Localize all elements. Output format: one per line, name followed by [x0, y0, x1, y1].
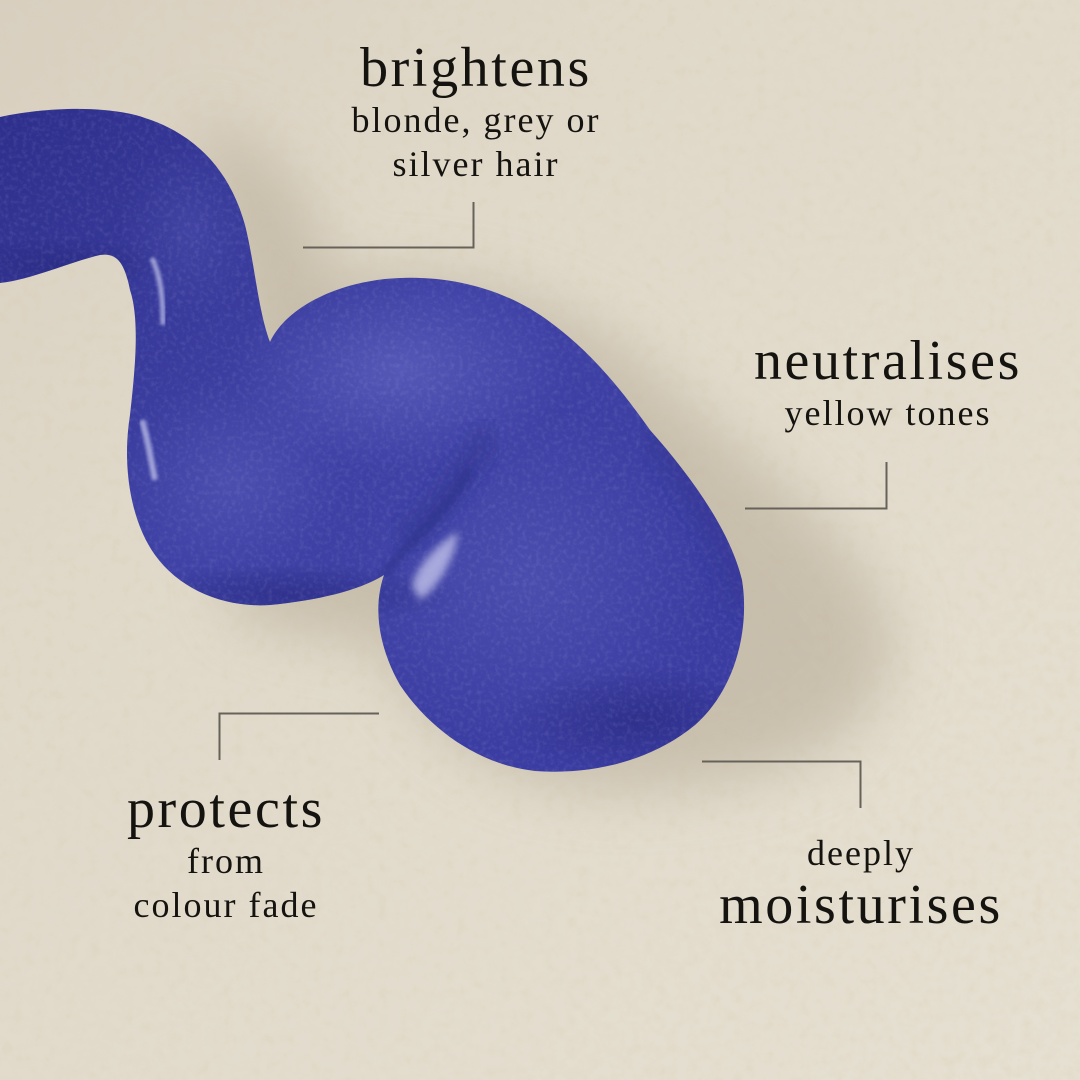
label: deeply moisturises: deeply — [807, 833, 915, 873]
label: neutralises: yellow tones — [784, 393, 991, 433]
label: protects — [127, 778, 325, 925]
label: neutralises — [754, 330, 1022, 433]
label: deeply moisturises: moisturises — [719, 874, 1003, 936]
highlight: gloss on bend — [142, 258, 163, 480]
label: brightens: blonde, grey or — [352, 100, 600, 140]
label: brightens: silver hair — [393, 144, 559, 184]
label: protects: protects — [127, 778, 325, 840]
connector: neutralises — [745, 462, 886, 508]
label: brightens — [352, 37, 600, 184]
label: deeply moisturises — [719, 833, 1003, 936]
connector: brightens — [303, 202, 474, 248]
label: protects: from — [187, 841, 265, 881]
product cast shadow — [190, 120, 892, 790]
connector: moisturises — [702, 762, 860, 808]
highlight: gloss on lower lobe — [412, 532, 458, 600]
connector: protects — [220, 714, 379, 760]
label: brightens: brightens — [360, 37, 592, 99]
blue cream swirl — [0, 108, 744, 772]
label: protects: colour fade — [134, 885, 318, 925]
label: neutralises: neutralises — [754, 330, 1022, 392]
